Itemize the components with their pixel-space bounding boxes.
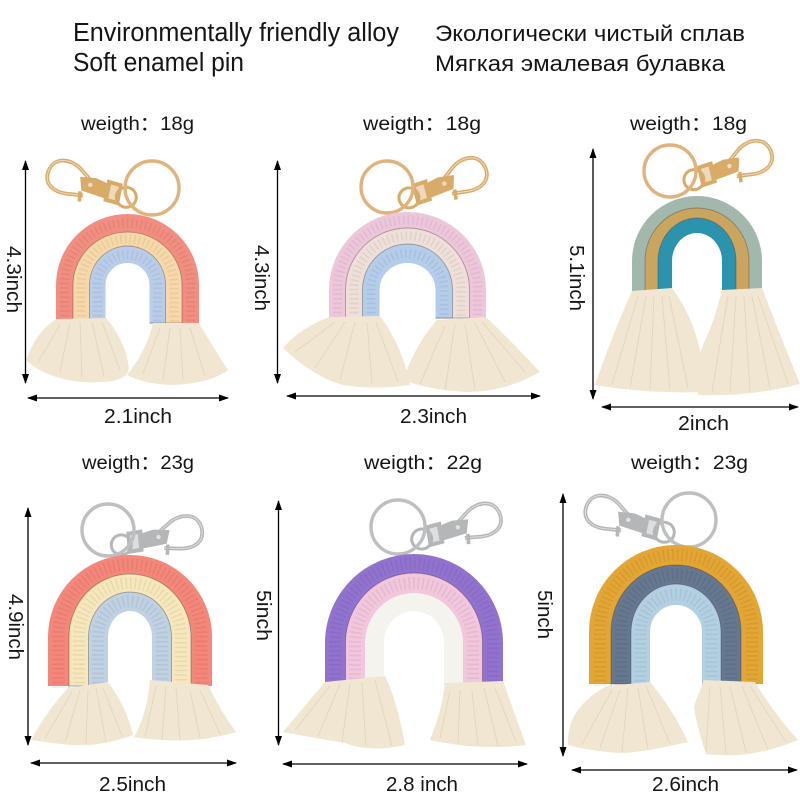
panel: keychain 5 purple silver: 2.8 inch [386,774,458,796]
panel: keychain 6 mustard silver: 5inch [533,590,555,639]
panel: keychain 2 pink pastel [250,114,540,428]
panel: keychain 5 purple silver [252,453,527,796]
panel: keychain 2 pink pastel: 4.3inch [250,245,272,311]
panel: keychain 1 coral pastel: weigth：18g [80,114,194,135]
panel: keychain 5 purple silver: 5inch [252,590,274,641]
panel: keychain 1 coral pastel [2,114,228,428]
panel: keychain 2 pink pastel: weigth：18g [362,114,481,135]
panel: keychain 5 purple silver: weigth：22g [363,453,482,474]
panel: keychain 1 coral pastel: 4.3inch [2,246,24,313]
title: Russian lines: Мягкая эмалевая булавка [435,51,726,76]
panel: keychain 4 coral silver: 4.9inch [4,594,26,660]
panel: keychain 6 mustard silver: weigth：23g [630,453,748,474]
panel: keychain 3 teal and gold: weigth：18g [629,114,747,135]
panel: keychain 1 coral pastel: 2.1inch [104,406,172,428]
panel: keychain 3 teal and gold [565,114,800,435]
title: Russian lines [435,21,745,76]
panel: keychain 3 teal and gold: 5.1inch [565,245,587,311]
title: English lines [73,19,399,77]
panel: keychain 6 mustard silver: 2.6inch [652,774,719,796]
title: English lines: Soft enamel pin [73,49,244,77]
title: English lines: Environmentally friendly alloy [73,19,399,47]
title: Russian lines: Экологически чистый сплав [435,21,745,46]
panel: keychain 4 coral silver: 2.5inch [99,774,166,796]
panel: keychain 6 mustard silver [533,453,798,796]
panel: keychain 4 coral silver [4,453,236,796]
panel: keychain 4 coral silver: weigth：23g [81,453,194,474]
panel: keychain 3 teal and gold: 2inch [678,413,729,435]
panel: keychain 2 pink pastel: 2.3inch [400,406,467,428]
